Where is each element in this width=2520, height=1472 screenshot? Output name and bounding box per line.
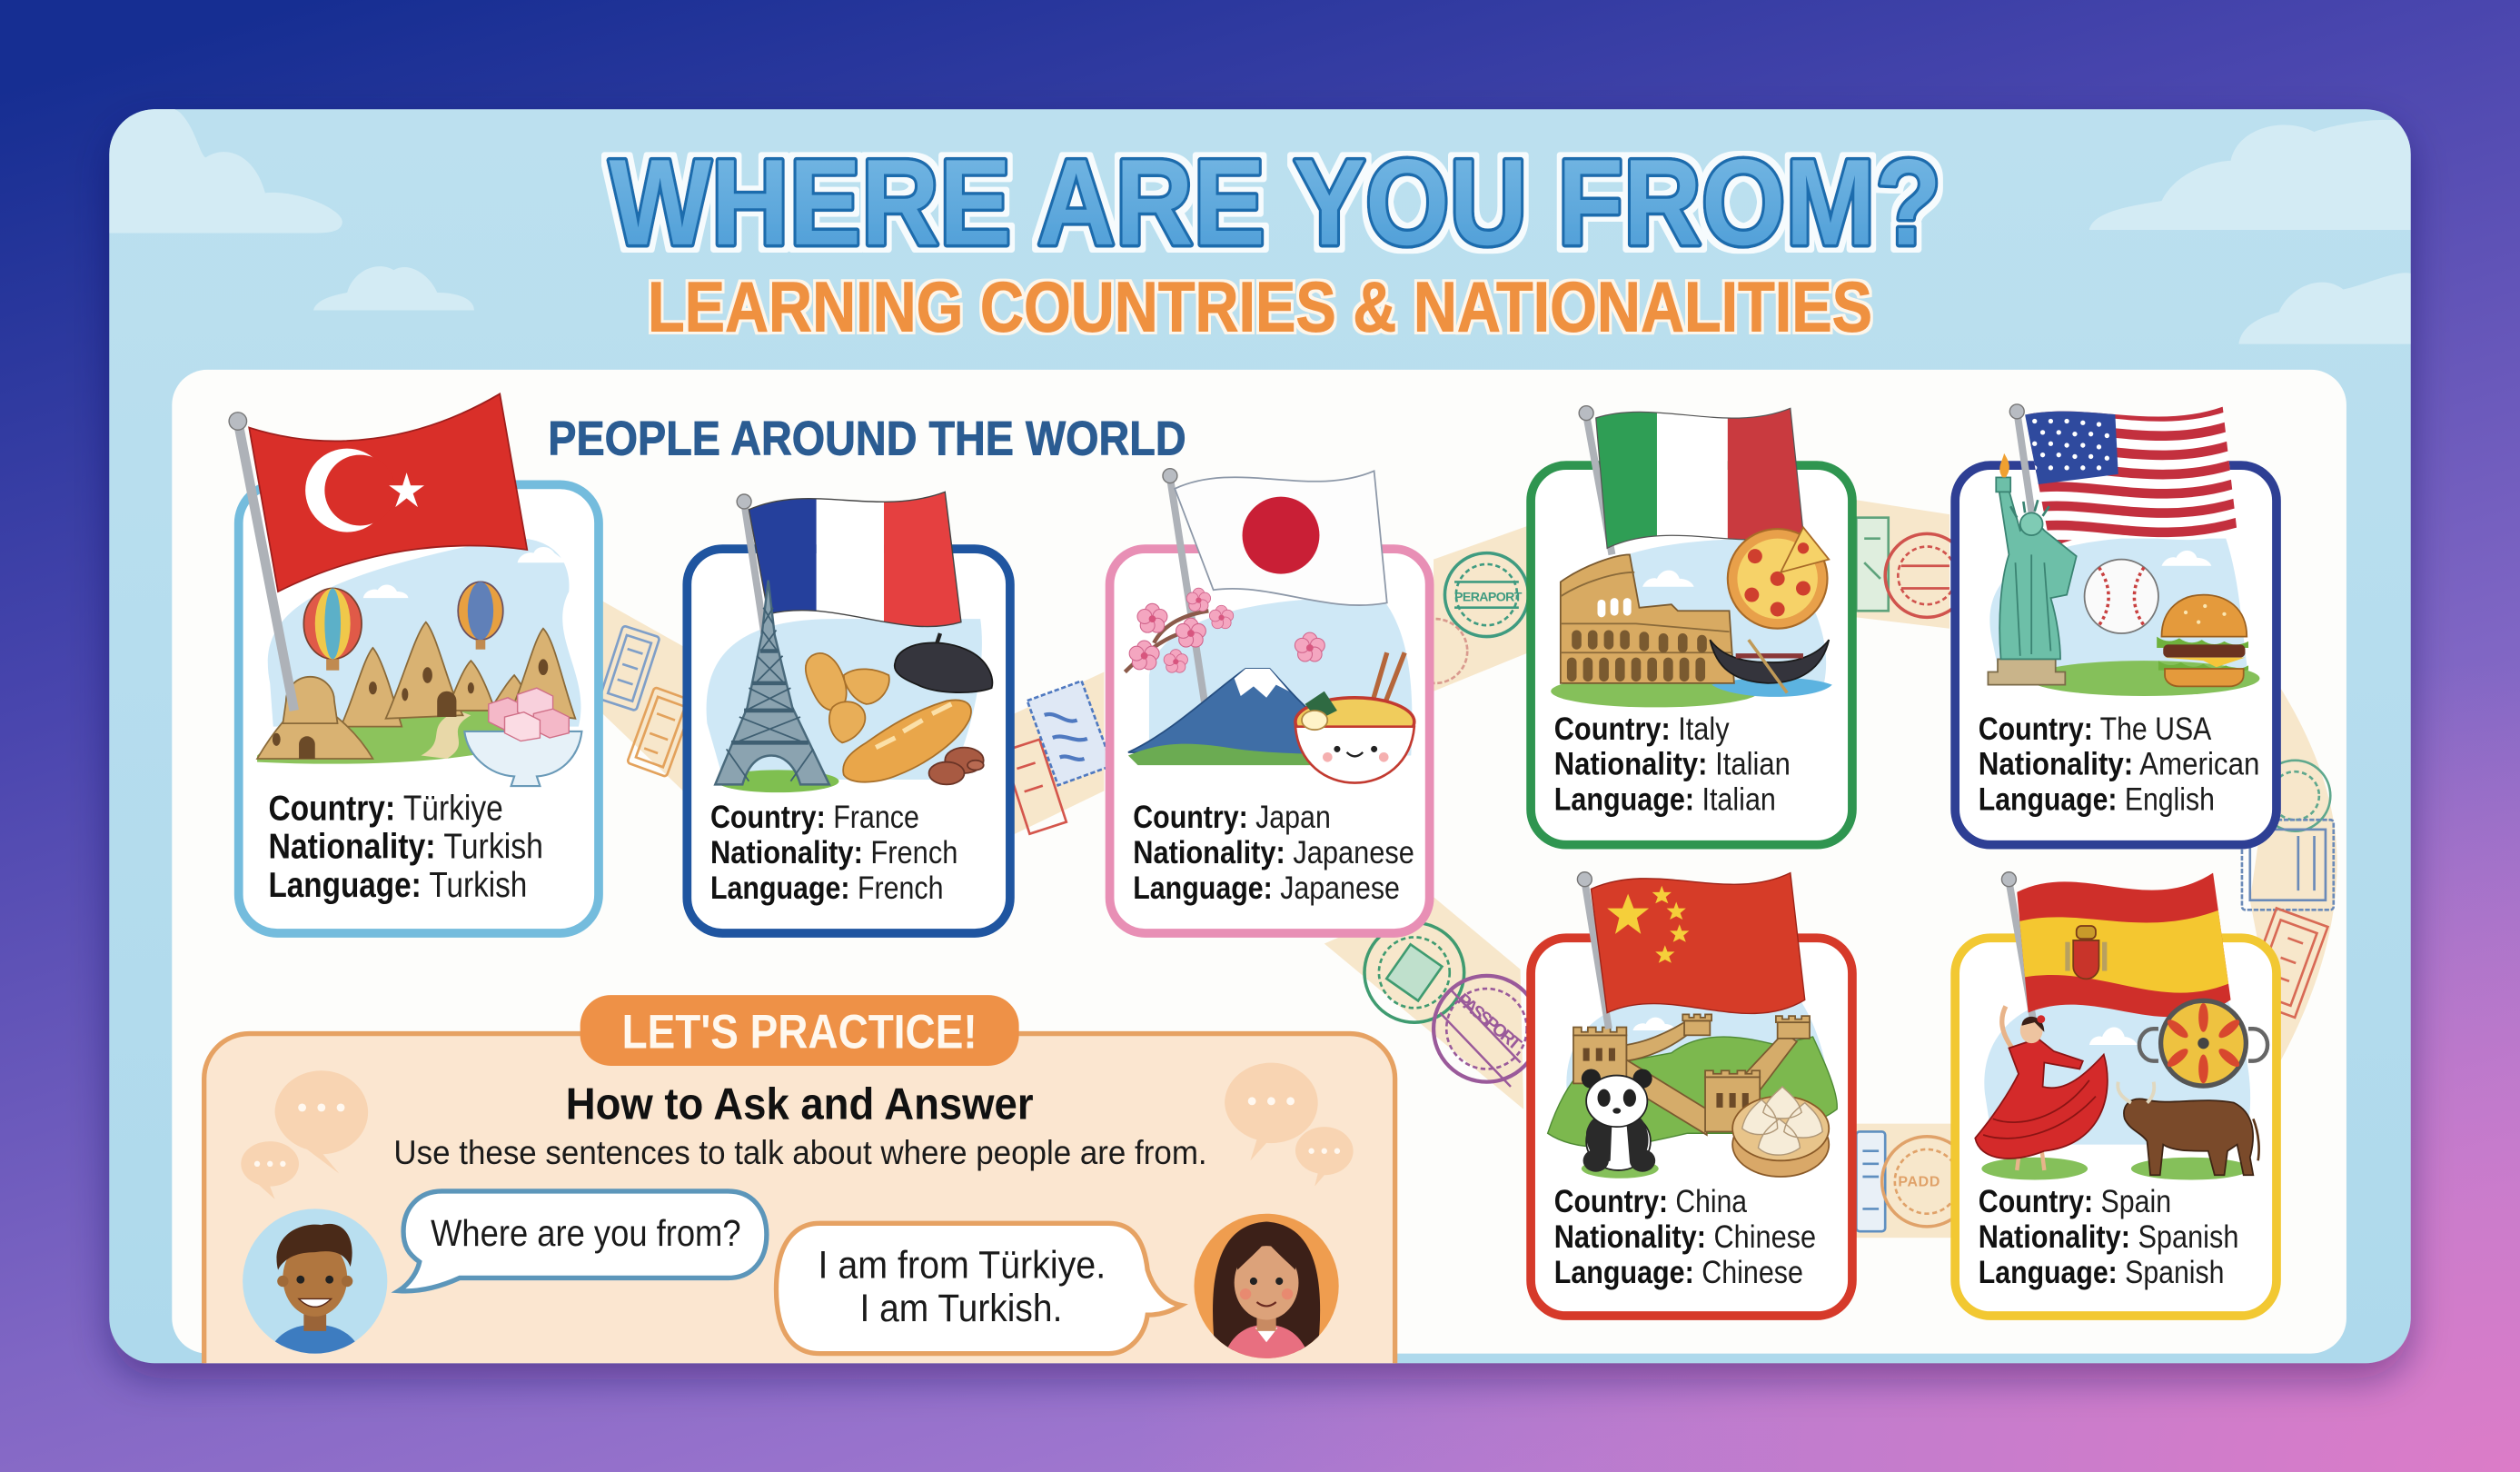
gondola [1710,640,1829,692]
card text [1979,1184,2238,1290]
badge: let's practice: LET'S PRACTICE! [622,1005,977,1059]
card frame [1110,549,1430,933]
card text: Country: France [710,800,919,835]
card text: Nationality: Chinese [1554,1219,1816,1255]
card text: Language: Turkish [268,866,527,905]
card text: Country: China [1554,1184,1747,1219]
passport stamp ribbon path: PERAPORT [1454,590,1523,604]
Colosseum [1561,554,1734,683]
card: Türkiye [229,393,599,933]
card text: Nationality: French [710,835,957,870]
card text: Nationality: American [1979,747,2259,782]
ramen bowl [1295,652,1414,783]
green hills [1548,1037,1837,1147]
speech bubble: question: Where are you from? [431,1212,741,1254]
cherry blossom branch [1125,588,1324,672]
Japan scene objects [1125,588,1414,783]
Turkish delight bowl [464,688,581,786]
card text: Language: Japanese [1133,870,1400,906]
clouds [109,105,2411,344]
card frame [239,484,599,933]
baseball [2085,560,2158,633]
Turkish flag [229,393,527,711]
card text: Country: Spain [1979,1184,2171,1219]
panda [1582,1069,1659,1179]
card frame [1955,465,2277,845]
Chinese flag [1577,872,1805,1029]
card: Spain [1955,852,2277,1316]
card text [1554,711,1791,818]
card text: Language: Chinese [1554,1255,1803,1290]
Japan scene background [1149,598,1412,755]
pizza [1728,527,1829,629]
white content card [172,370,2346,1354]
Great Wall [1573,1014,1810,1135]
card text [1133,800,1414,906]
heading: people around the world: PEOPLE AROUND THE WORLD [548,413,1186,466]
French flag [737,474,972,691]
Italy scene [1551,539,1832,707]
Japanese flag [1163,469,1387,707]
passport stamp ribbon path: PASSPORT [1453,990,1525,1055]
card text: Country: Türkiye [268,789,503,828]
card text: Language: Spanish [1979,1255,2224,1290]
card text: Language: English [1979,782,2215,818]
Statue of Liberty [1988,453,2077,685]
flamenco dancer [1975,1006,2108,1170]
title: WHERE ARE YOU FROM? [610,134,1941,271]
panel heading: How to Ask and Answer [566,1079,1034,1129]
card: Japan [1110,469,1430,933]
card frame [1531,465,1852,845]
American flag [2009,393,2250,562]
practice panel [204,995,1395,1419]
card text: Country: The USA [1979,711,2212,747]
Spain scene [1981,997,2259,1180]
card text [710,800,957,906]
card: France [687,474,1010,933]
speech bubble: answer [776,1223,1181,1354]
instruction text: Use these sentences to talk about where people are from. [393,1133,1207,1171]
paella [2139,999,2267,1089]
card text [268,789,543,905]
speech bubble: question [399,1191,767,1291]
card text: Country: Japan [1133,800,1331,835]
decorative speech bubbles [241,1063,1354,1199]
card text [1554,1184,1816,1290]
card: China [1531,872,1852,1316]
card text: Nationality: Spanish [1979,1219,2238,1255]
card frame [687,549,1010,933]
card text: Nationality: Japanese [1133,835,1414,870]
card text: Nationality: Turkish [268,828,543,867]
Italian flag [1579,393,1816,562]
avatar: girl [1194,1214,1339,1367]
Mount Fuji [1128,669,1382,765]
bull [2118,1082,2259,1175]
burger [2157,595,2248,686]
badge: let's practice [580,995,1019,1066]
card text [1979,711,2259,818]
card: Italy [1531,393,1852,845]
beret [895,633,992,692]
baguette [843,700,971,782]
Spanish flag [2001,852,2242,1053]
passport stamp ribbon path: PADD [1898,1175,1940,1190]
passport stamp ribbon path [600,500,2337,1238]
card text: Language: French [710,870,943,906]
card text: Country: Italy [1554,711,1730,747]
speech bubble: answer: I am from Türkiye. [818,1243,1106,1286]
sausage slices [929,748,984,784]
subtitle: LEARNING COUNTRIES & NATIONALITIES [648,268,1872,346]
card text: Nationality: Italian [1554,747,1791,782]
card frame [1531,938,1852,1316]
dumpling basket [1732,1087,1829,1177]
USA scene [1989,539,2259,696]
speech bubble: answer: I am Turkish. [859,1287,1062,1329]
peach box [204,1034,1395,1419]
Cappadocia scene [257,538,581,786]
China scene [1548,1000,1837,1179]
croissant [806,653,889,742]
avatar: boy [243,1208,387,1367]
card: The USA [1955,393,2277,845]
card text: Language: Italian [1554,782,1776,818]
France scene [707,619,992,792]
hot air balloons [303,582,503,671]
card frame [1955,938,2277,1316]
Eiffel tower [715,581,829,784]
